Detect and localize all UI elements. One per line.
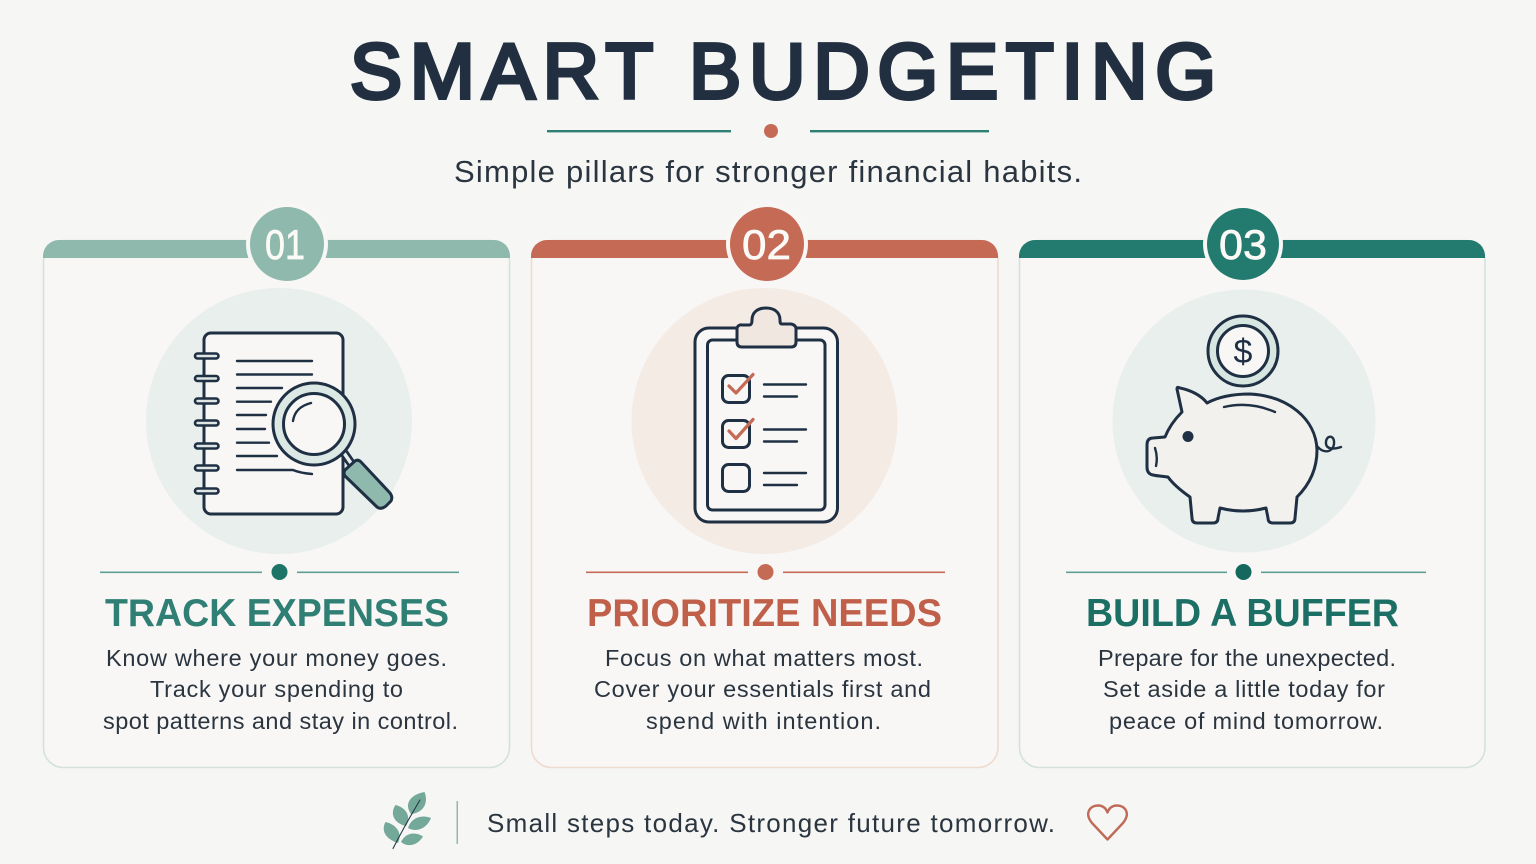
description: spot patterns and stay in control. (103, 708, 458, 734)
panel: prioritize needs (531, 203, 998, 768)
description: spend with intention. (646, 708, 881, 734)
number badge 03 (1203, 204, 1283, 284)
description: Prepare for the unexpected. (1098, 645, 1396, 671)
panel: track expenses (43, 203, 510, 768)
title ornament (547, 124, 989, 138)
footer (384, 792, 1127, 848)
description: Know where your money goes. (106, 645, 447, 671)
separator (456, 801, 458, 844)
icon: clipboard checklist (695, 308, 838, 522)
icon backdrop circle (146, 288, 412, 554)
divider (1066, 564, 1426, 580)
heading: BUILD A BUFFER (1086, 592, 1399, 635)
description: Set aside a little today for (1103, 676, 1385, 702)
icon: heart (1088, 806, 1127, 840)
number badge 02 (726, 203, 808, 285)
card top bar (43, 240, 510, 258)
description: Track your spending to (150, 676, 403, 702)
icon: notebook with magnifying glass (195, 333, 392, 514)
card background (1020, 240, 1485, 768)
title: SMART BUDGETING (350, 27, 1216, 115)
icon: leaf sprig (384, 792, 431, 848)
description (1098, 645, 1396, 734)
heading: TRACK EXPENSES (105, 592, 449, 635)
icon: piggy bank with coin: $ (1234, 333, 1253, 371)
number badge 02: 02 (742, 221, 791, 268)
card background (532, 240, 998, 768)
description: Cover your essentials first and (594, 676, 931, 702)
icon: piggy bank with coin (1147, 316, 1341, 523)
card background (44, 240, 510, 768)
description: Focus on what matters most. (605, 645, 923, 671)
description (103, 645, 458, 734)
description: peace of mind tomorrow. (1109, 708, 1383, 734)
panel: build a buffer (1019, 204, 1485, 768)
divider (586, 564, 945, 580)
number badge 01: 01 (265, 221, 305, 268)
subtitle: Simple pillars for stronger financial habits. (454, 154, 1082, 189)
card top bar (531, 240, 998, 258)
heading: PRIORITIZE NEEDS (587, 592, 942, 635)
icon backdrop circle (1112, 290, 1376, 552)
card top bar (1019, 240, 1485, 258)
tagline: Small steps today. Stronger future tomorrow. (487, 808, 1055, 838)
number badge 03: 03 (1219, 221, 1267, 268)
divider (100, 564, 459, 580)
description (594, 645, 931, 734)
number badge 01 (246, 203, 328, 285)
icon backdrop circle (632, 288, 898, 554)
